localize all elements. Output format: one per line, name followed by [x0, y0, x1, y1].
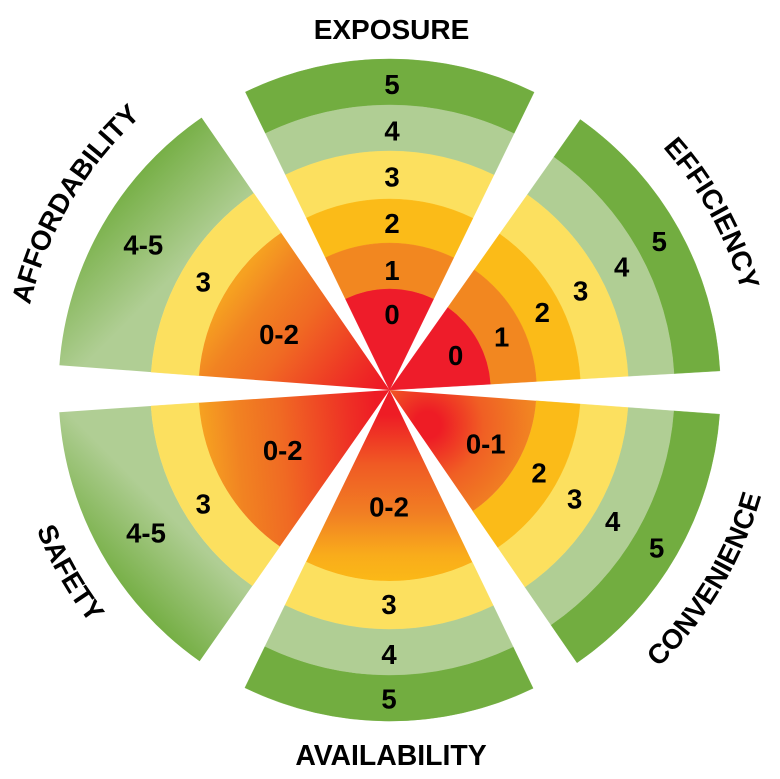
band 3	[151, 193, 281, 376]
score 5: 5	[384, 69, 400, 100]
band 0-2	[306, 390, 472, 581]
band 1	[326, 243, 454, 299]
band 2	[474, 234, 580, 382]
band 0-2	[199, 233, 390, 390]
heading: safety: SAFETY	[38, 525, 105, 618]
band 3	[285, 562, 493, 629]
panel: availability	[245, 390, 533, 721]
band 2	[306, 199, 473, 258]
heading: availability: AVAILABILITY	[295, 740, 487, 772]
band 0	[346, 289, 434, 390]
score 2: 2	[531, 457, 547, 488]
score 0-2: 0-2	[369, 492, 409, 523]
score 0-1: 0-1	[466, 428, 506, 459]
score 0: 0	[448, 340, 463, 371]
band 4	[525, 408, 674, 625]
band 4	[265, 605, 513, 675]
score 3: 3	[196, 267, 211, 298]
score 5: 5	[381, 683, 397, 714]
score 4: 4	[381, 639, 397, 670]
band 5	[245, 646, 533, 721]
score 0: 0	[384, 299, 400, 330]
score 3: 3	[381, 589, 397, 620]
score 4: 4	[614, 252, 630, 282]
band 3	[498, 404, 628, 587]
band 4	[266, 105, 514, 175]
score 5: 5	[652, 226, 667, 257]
band 4	[527, 157, 674, 376]
heading: convenience: CONVENIENCE	[649, 492, 761, 664]
band 5	[551, 411, 720, 663]
band 3	[286, 151, 494, 218]
score 3: 3	[196, 488, 211, 519]
heading: exposure: EXPOSURE	[314, 14, 469, 45]
score 4: 4	[605, 506, 621, 537]
score 2: 2	[535, 297, 550, 328]
score 0-2: 0-2	[259, 319, 299, 350]
score 2: 2	[384, 208, 400, 239]
band 2	[473, 401, 580, 547]
score 3: 3	[573, 276, 588, 306]
score 3: 3	[384, 162, 400, 192]
band 3	[500, 195, 628, 379]
score 3: 3	[567, 483, 582, 514]
band 3	[151, 403, 280, 586]
score 5: 5	[649, 532, 664, 563]
band 0	[390, 308, 490, 390]
heading: affordability: AFFORDABILITY	[13, 102, 136, 304]
score 4-5: 4-5	[126, 518, 166, 549]
band 0-1	[390, 390, 536, 511]
panel: convenience	[390, 390, 720, 663]
score 4: 4	[384, 116, 400, 146]
band 5	[245, 59, 534, 134]
score 1: 1	[494, 322, 509, 352]
panel: exposure	[245, 59, 534, 390]
panel: efficiency	[390, 120, 720, 390]
band 1	[448, 270, 536, 384]
panel: affordability	[59, 118, 390, 390]
band 5	[554, 120, 720, 374]
score 0-2: 0-2	[263, 435, 303, 466]
score 4-5: 4-5	[123, 229, 163, 260]
score 1: 1	[384, 255, 400, 286]
panel: safety	[59, 390, 390, 661]
band 0-2	[199, 390, 390, 546]
band 4-5	[59, 118, 254, 372]
band 4-5	[59, 406, 252, 661]
heading: efficiency: EFFICIENCY	[664, 136, 760, 285]
